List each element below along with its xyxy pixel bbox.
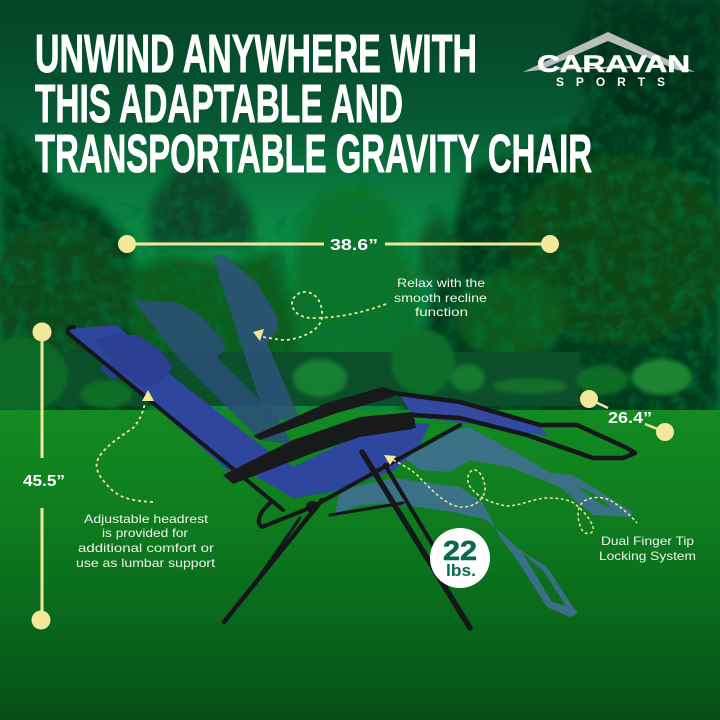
badge: weight 22 lbs (430, 528, 490, 588)
footrest hinge (306, 501, 318, 513)
callout: recline: function (415, 305, 468, 319)
dimension: height 45.5 (23, 322, 65, 630)
callout: recline: Relax with the (397, 276, 485, 290)
background trees (0, 0, 720, 420)
seat fabric (67, 325, 430, 498)
top tint (0, 0, 720, 160)
callout: headrest: additional comfort or (78, 541, 214, 555)
logo: Caravan Sports (523, 32, 695, 89)
callout: locking system (384, 455, 696, 563)
lawn (0, 410, 720, 720)
dimension: depth 26.4: 26.4” (608, 410, 652, 427)
logo: Caravan Sports: SPORTS (556, 75, 665, 89)
ghost chair: footrest positions (335, 428, 633, 617)
dimension: height 45.5: 45.5” (23, 473, 65, 490)
callout: recline (253, 276, 487, 341)
background sky (0, 0, 720, 420)
callout: headrest: is provided for (102, 526, 188, 540)
callout: headrest: use as lumbar support (76, 556, 216, 570)
badge: weight 22 lbs: 22 (443, 535, 477, 566)
dimension: depth 26.4 (580, 390, 674, 441)
title: THIS ADAPTABLE AND (35, 74, 403, 134)
callout: headrest: Adjustable headrest (84, 512, 209, 526)
armrests (253, 387, 393, 440)
callout: locking system: Dual Finger Tip (601, 534, 694, 548)
foliage mottling (0, 0, 720, 420)
upper footrest fabric (400, 395, 548, 436)
dimension: width 38.6: 38.6” (330, 237, 378, 254)
ghost chair: upright reclined positions (133, 254, 300, 445)
badge: weight 22 lbs: lbs. (446, 561, 476, 580)
dimension: width 38.6 (118, 235, 559, 254)
logo: Caravan Sports: CARAVAN (537, 51, 690, 78)
title: UNWIND ANYWHERE WITH (35, 24, 477, 84)
callout: locking system: Locking System (599, 549, 696, 563)
frame (68, 327, 635, 628)
fence (55, 352, 580, 406)
callout: recline: smooth recline (394, 291, 487, 305)
title (35, 24, 592, 184)
chair (67, 325, 635, 628)
headrest pillow (95, 335, 173, 387)
callout: headrest (76, 390, 216, 570)
